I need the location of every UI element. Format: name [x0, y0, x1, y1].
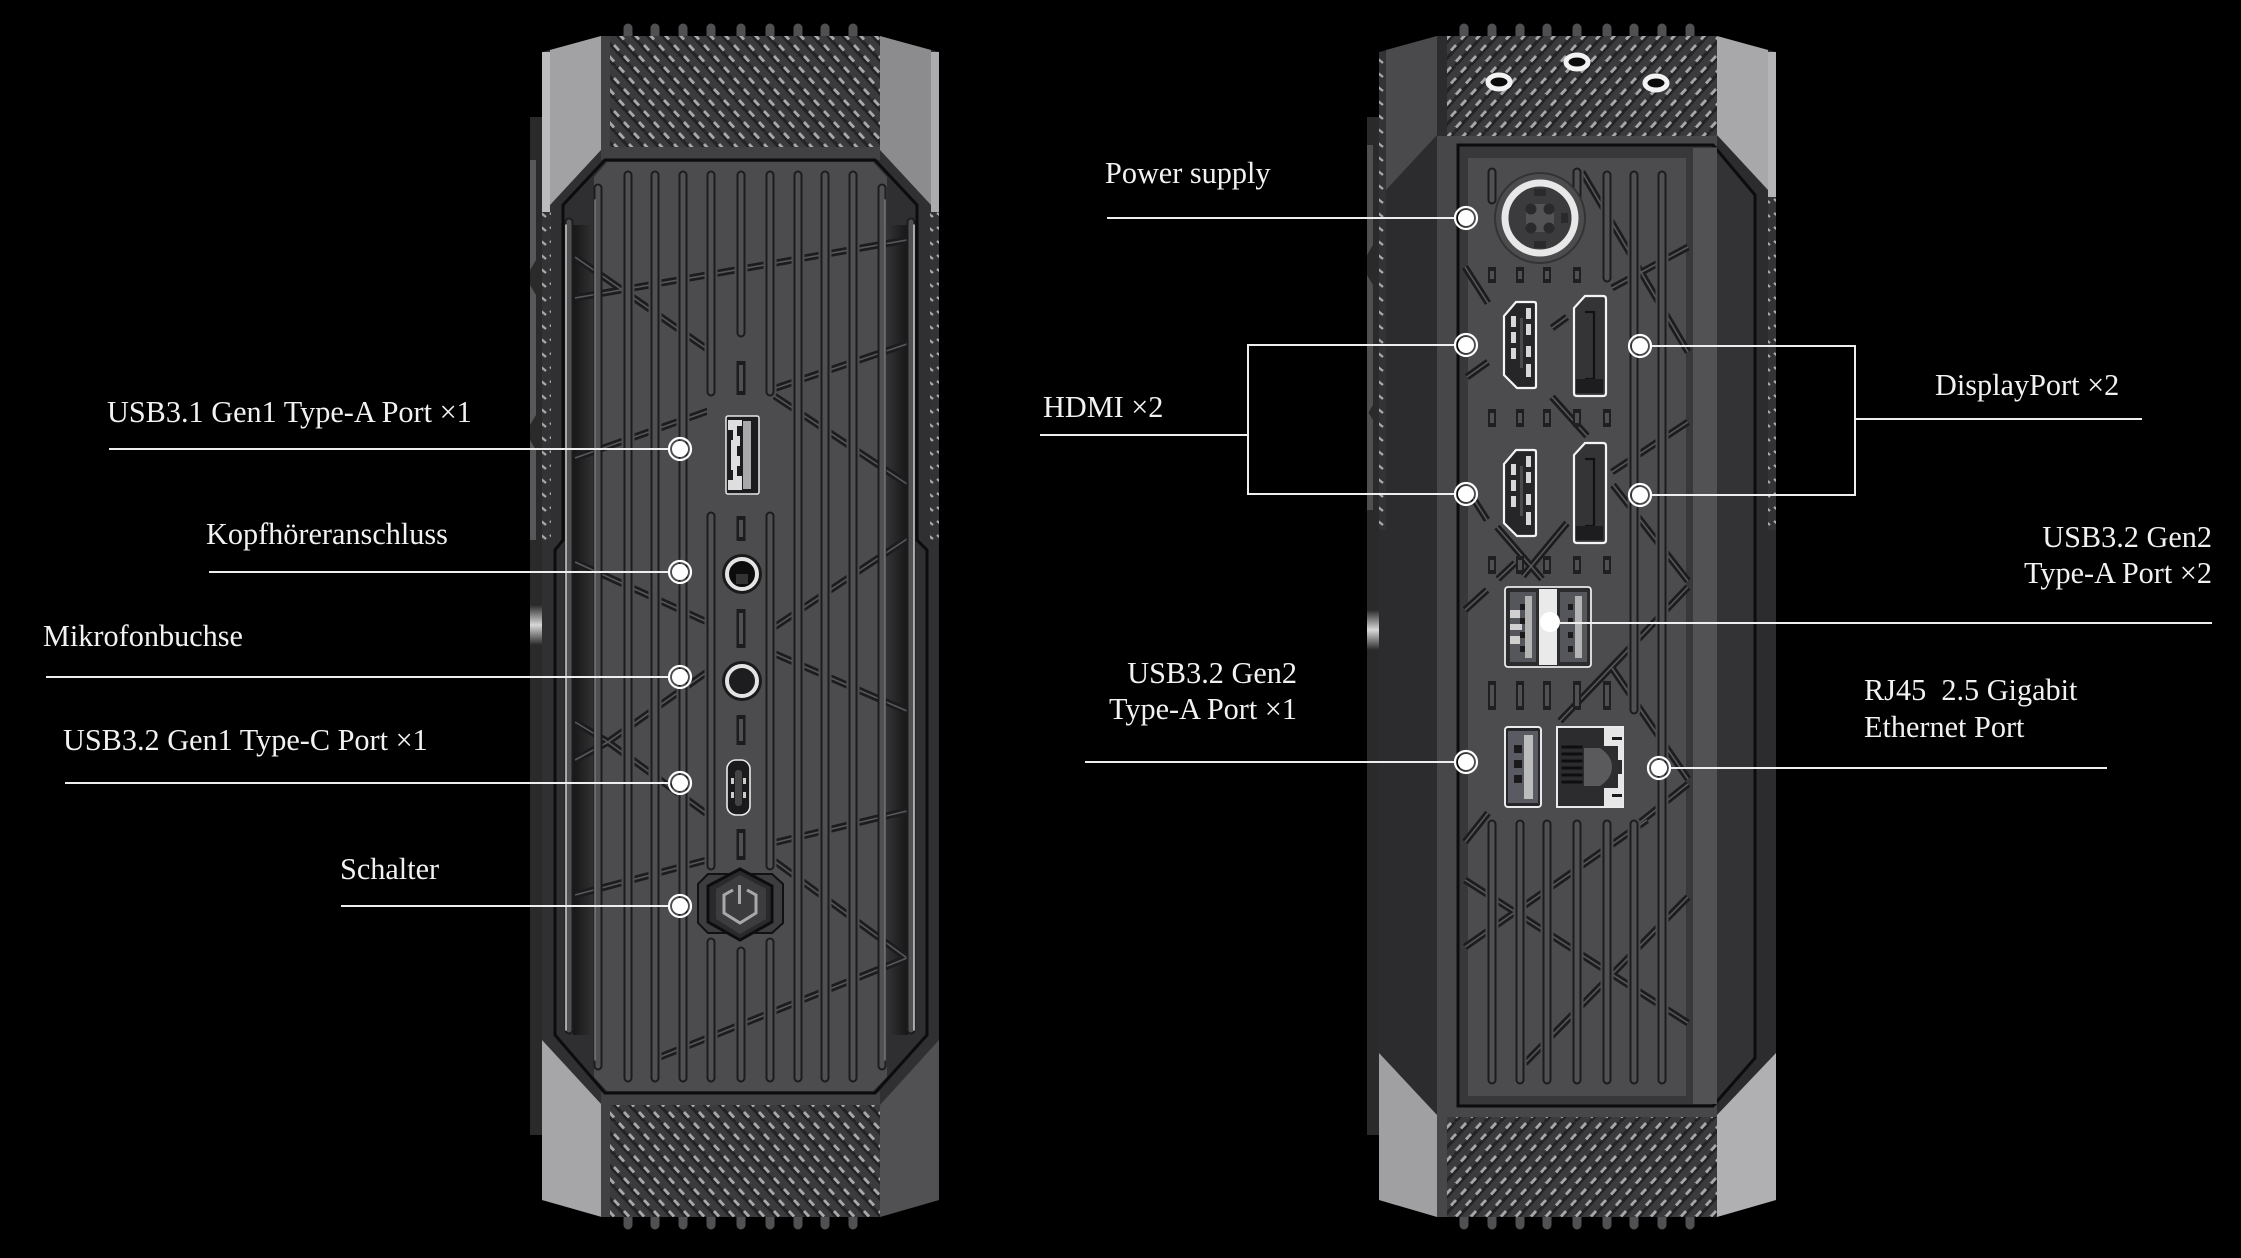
carbon fibre top cap — [1447, 36, 1717, 136]
body shell — [542, 36, 939, 1217]
port: dual USB-A — [1505, 587, 1591, 667]
diagonal grooves — [1465, 172, 1688, 1063]
callout: RJ45 Ethernet — [1648, 673, 2107, 779]
right raised strip — [1693, 148, 1717, 1104]
port: DisplayPort upper — [1574, 296, 1606, 396]
callout: USB3.1 Gen1 Type-A: USB3.1 Gen1 Type-A Port ×1 — [107, 395, 472, 429]
side carbon strips — [1379, 52, 1776, 530]
side carbon strips — [542, 52, 939, 540]
callout: Power supply: Power supply — [1105, 156, 1271, 190]
callout: USB3.2 Gen2 single: Type-A Port ×1 — [1109, 692, 1297, 726]
callout: Schalter — [340, 852, 691, 917]
port: power connector — [1495, 173, 1585, 263]
top pins — [628, 28, 853, 36]
bottom pins — [628, 1217, 853, 1225]
panel surface — [1460, 147, 1717, 1104]
carbon fibre top cap — [610, 36, 880, 147]
callout: USB3.2 Gen1 Type-C — [63, 723, 691, 794]
inner panel — [1468, 158, 1686, 1096]
callout: Kopfhöreranschluss: Kopfhöreranschluss — [206, 517, 448, 551]
side recesses — [573, 225, 908, 1035]
ribbed centre panel — [594, 162, 887, 1091]
top pins — [1464, 28, 1690, 36]
carbon fibre bottom cap — [610, 1105, 880, 1217]
mounting holes — [1488, 55, 1667, 90]
port: USB-C — [727, 760, 750, 815]
callout: RJ45 Ethernet: Ethernet Port — [1864, 710, 2025, 744]
callout: Power supply — [1105, 156, 1477, 229]
callout: DisplayPort bracket: DisplayPort ×2 — [1935, 368, 2119, 402]
callout: USB3.2 Gen2 single: USB3.2 Gen2 — [1127, 656, 1297, 690]
port: HDMI lower — [1504, 450, 1536, 536]
cap bands — [601, 36, 880, 160]
port: headphone jack — [722, 554, 762, 594]
port: RJ45 Ethernet — [1557, 727, 1623, 807]
callout: Kopfhöreranschluss — [206, 517, 691, 583]
callout: Mikrofonbuchse: Mikrofonbuchse — [43, 619, 243, 653]
callout: RJ45 Ethernet: RJ45 2.5 Gigabit — [1864, 673, 2078, 707]
body shell — [1379, 36, 1776, 1217]
metal corners — [1379, 36, 1776, 1217]
callout: DisplayPort bracket — [1629, 335, 2142, 506]
callout: Mikrofonbuchse — [43, 619, 691, 688]
rear mounting tab — [1367, 117, 1379, 1135]
callout: USB3.1 Gen1 Type-A — [107, 395, 691, 460]
rear mounting tab — [530, 117, 542, 1135]
callout: HDMI bracket — [1040, 334, 1477, 505]
metal corners — [542, 36, 939, 1217]
port: HDMI upper — [1504, 302, 1536, 388]
callout: HDMI bracket: HDMI ×2 — [1043, 390, 1163, 424]
left frame band — [1437, 136, 1717, 1217]
device: rear view — [1367, 28, 1776, 1225]
centre port plate — [707, 322, 773, 967]
port: single USB-A — [1505, 727, 1541, 807]
panel frame — [555, 160, 927, 1093]
heat-sink fins — [1492, 172, 1662, 1080]
port: microphone jack — [722, 661, 762, 701]
port: USB-A — [726, 416, 759, 494]
callout: USB3.2 Gen2 dual: USB3.2 Gen2 — [2042, 520, 2212, 554]
callout: Schalter: Schalter — [340, 852, 439, 886]
port: DisplayPort lower — [1574, 443, 1606, 543]
callout: USB3.2 Gen2 dual — [1540, 520, 2212, 632]
callout: USB3.2 Gen1 Type-C: USB3.2 Gen1 Type-C Port ×1 — [63, 723, 428, 757]
callout: USB3.2 Gen2 dual: Type-A Port ×2 — [2024, 556, 2212, 590]
carbon fibre bottom cap — [1447, 1117, 1717, 1217]
heat-sink fins — [566, 175, 914, 1078]
callout: USB3.2 Gen2 single — [1085, 656, 1477, 773]
power button — [698, 869, 783, 940]
device: front view — [530, 28, 939, 1225]
diagonal grooves — [575, 240, 907, 1057]
panel frame — [1458, 145, 1755, 1106]
bottom pins — [1464, 1217, 1690, 1225]
